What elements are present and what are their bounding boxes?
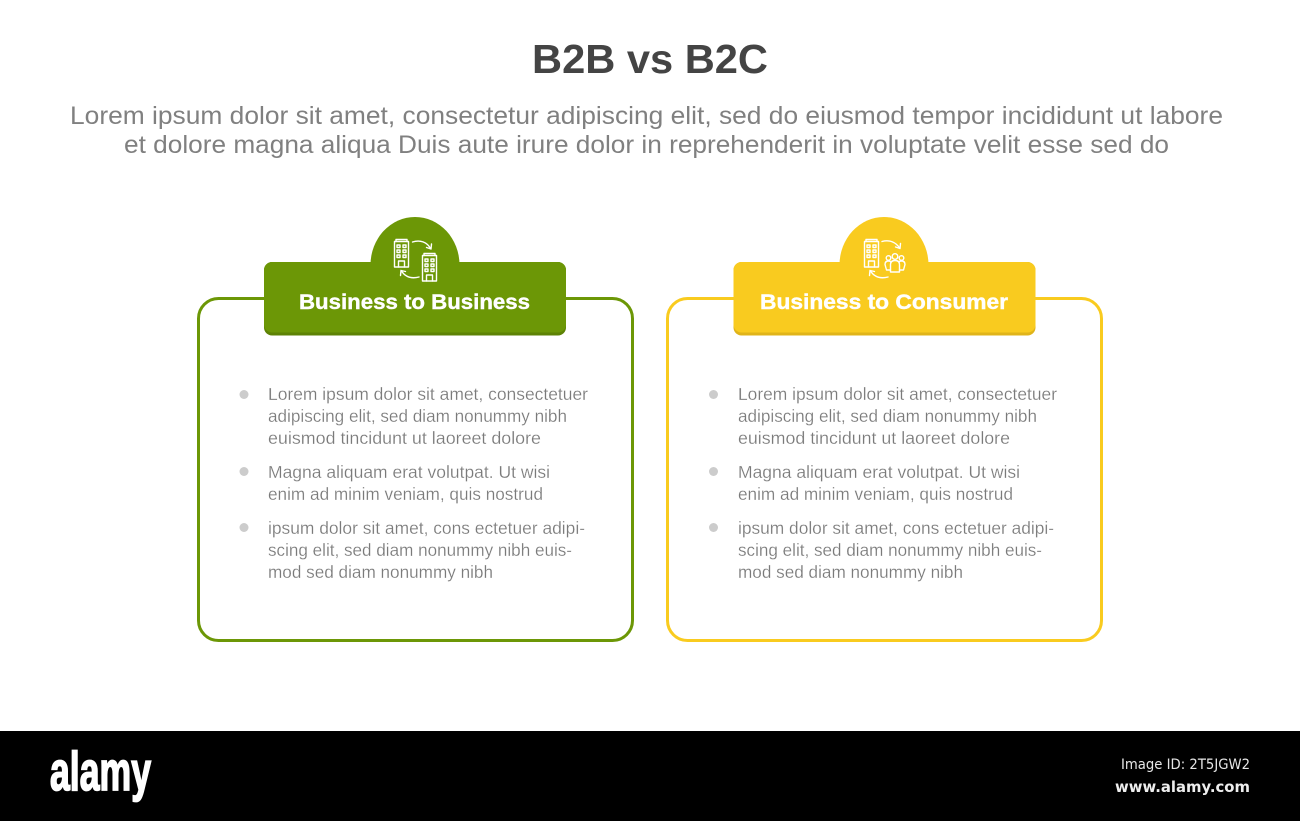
bullet item 3: ipsum dolor sit amet, cons ectetuer adipi- xyxy=(268,518,585,538)
bullet item 3: mod sed diam nonummy nibh xyxy=(738,562,963,582)
subtitle text block xyxy=(70,102,1223,159)
bullet item 3: ipsum dolor sit amet, cons ectetuer adipi- xyxy=(738,518,1054,538)
bullet item 3: mod sed diam nonummy nibh xyxy=(268,562,493,582)
footer logo: alamy xyxy=(50,740,151,802)
footer band xyxy=(0,731,1300,821)
icon badge: green semicircle xyxy=(370,217,460,265)
bullet item 1: Lorem ipsum dolor sit amet, consectetuer xyxy=(268,384,588,404)
footer url: www.alamy.com xyxy=(1115,778,1250,796)
icon: building to consumers exchange xyxy=(864,240,905,278)
panel: business to business xyxy=(198,217,632,640)
bullet item 2: enim ad minim veniam, quis nostrud xyxy=(738,484,1013,504)
bullet list xyxy=(240,384,588,582)
bullet item 2: enim ad minim veniam, quis nostrud xyxy=(268,484,543,504)
bullet item 2: Magna aliquam erat volutpat. Ut wisi xyxy=(268,462,550,482)
bullet item 1: Lorem ipsum dolor sit amet, consectetuer xyxy=(738,384,1057,404)
subtitle text block: et dolore magna aliqua Duis aute irure dolor in reprehenderit in voluptate velit esse sed do xyxy=(124,131,1169,159)
header label: Business to Business xyxy=(299,291,530,314)
icon: building exchange xyxy=(394,240,436,281)
panel outline: green xyxy=(198,298,632,640)
bullet item 1 xyxy=(240,384,588,448)
bullet item 3: scing elit, sed diam nonummy nibh euis- xyxy=(268,540,572,560)
bullet item 1: adipiscing elit, sed diam nonummy nibh xyxy=(268,406,567,426)
bullet item 2: Magna aliquam erat volutpat. Ut wisi xyxy=(738,462,1020,482)
bullet item 3: scing elit, sed diam nonummy nibh euis- xyxy=(738,540,1042,560)
bullet item 1 xyxy=(709,384,1057,448)
bullet item 1: euismod tincidunt ut laoreet dolore xyxy=(268,428,541,448)
title: B2B vs B2C xyxy=(532,36,768,82)
header bar: yellow xyxy=(734,262,1036,336)
header bar: green xyxy=(264,262,566,336)
bullet item 2 xyxy=(709,462,1020,504)
image id: Image ID: 2T5JGW2 xyxy=(1121,757,1250,773)
bullet list xyxy=(709,384,1057,582)
header label: Business to Consumer xyxy=(760,291,1008,314)
bullet item 3 xyxy=(709,518,1054,582)
bullet item 2 xyxy=(240,462,550,504)
bullet item 3 xyxy=(240,518,585,582)
panel: business to consumer xyxy=(668,217,1102,640)
panel outline: yellow xyxy=(668,298,1102,640)
bullet item 1: adipiscing elit, sed diam nonummy nibh xyxy=(738,406,1037,426)
subtitle text block: Lorem ipsum dolor sit amet, consectetur adipiscing elit, sed do eiusmod tempor incididunt ut labore xyxy=(70,102,1223,130)
bullet item 1: euismod tincidunt ut laoreet dolore xyxy=(738,428,1010,448)
icon badge: yellow semicircle xyxy=(840,217,928,265)
